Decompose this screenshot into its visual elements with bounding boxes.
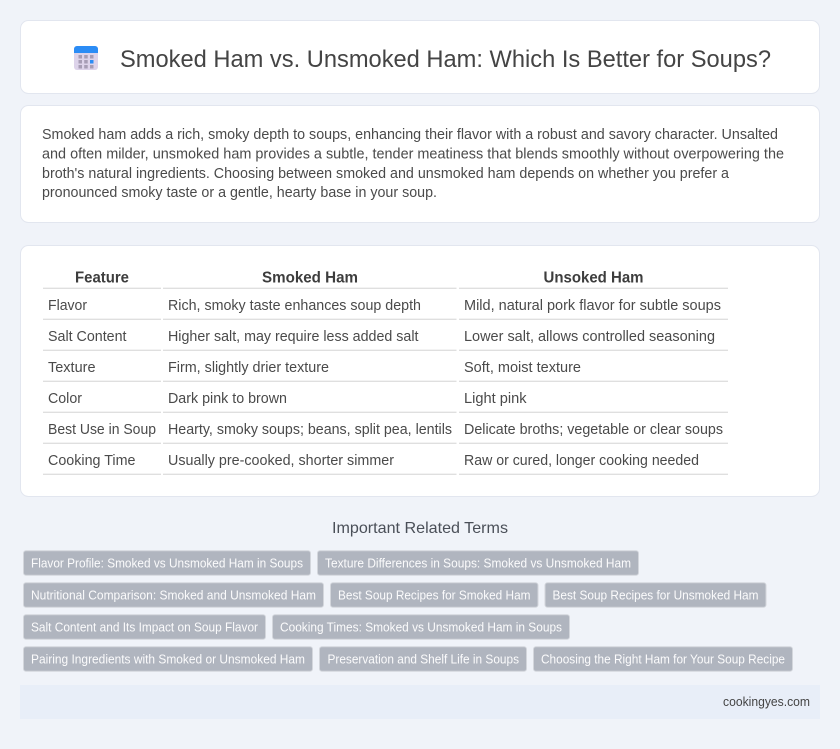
footer [20, 685, 820, 719]
tag [24, 615, 266, 639]
table row: best use in soup: Delicate broths; vegetable or clear soups [464, 422, 723, 438]
tag [272, 615, 570, 639]
table row: flavor: Rich, smoky taste enhances soup depth [168, 298, 421, 314]
table row: cooking time: Cooking Time [48, 453, 136, 469]
icon: calendar [74, 46, 98, 70]
tag [330, 583, 538, 607]
table row: texture: Texture [48, 360, 96, 376]
tag [318, 551, 638, 575]
table row: color: Dark pink to brown [168, 391, 287, 407]
tag [545, 583, 766, 607]
table row: salt content: Lower salt, allows controlled seasoning [464, 329, 715, 345]
table row: cooking time: Raw or cured, longer cooking needed [464, 453, 699, 469]
table row: texture: Soft, moist texture [464, 360, 581, 376]
tag: Choosing the Right Ham for Your Soup Recipe [541, 652, 785, 666]
table row: best use in soup: Hearty, smoky soups; beans, split pea, lentils [168, 422, 452, 438]
tag: Cooking Times: Smoked vs Unsmoked Ham in Soups [280, 620, 562, 634]
heading: important related terms: Important Related Terms [332, 520, 508, 537]
table header row: Smoked Ham [262, 270, 358, 287]
table row: cooking time [48, 453, 699, 469]
tag [24, 551, 310, 575]
tag: Texture Differences in Soups: Smoked vs Unsmoked Ham [325, 556, 631, 570]
footer: cookingyes.com [723, 695, 810, 709]
panel: description [20, 106, 820, 222]
tag: Best Soup Recipes for Unsmoked Ham [552, 588, 758, 602]
tag [534, 647, 792, 671]
tag: Best Soup Recipes for Smoked Ham [338, 588, 530, 602]
table row: texture: Firm, slightly drier texture [168, 360, 329, 376]
panel: title header [20, 20, 820, 94]
tag: Flavor Profile: Smoked vs Unsmoked Ham in Soups [31, 556, 303, 570]
table row: best use in soup: Best Use in Soup [48, 422, 156, 438]
tag [24, 647, 312, 671]
table row: color: Color [48, 391, 82, 407]
table row: flavor: Mild, natural pork flavor for subtle soups [464, 298, 721, 314]
table row: color: Light pink [464, 391, 527, 407]
text block: description paragraph: and often milder, unsmoked ham provides a subtle, tender meatiness that blends smoothly without overpowering the [42, 146, 784, 162]
text block: description paragraph: Smoked ham adds a rich, smoky depth to soups, enhancing their flavor with a robust and savory character. Unsalted [42, 127, 778, 143]
table row: best use in soup [48, 422, 723, 438]
table row: salt content: Higher salt, may require less added salt [168, 329, 418, 345]
text block: description paragraph: broth's natural ingredients. Choosing between smoked and unsmoked ham depends on whether you prefer a [42, 166, 730, 182]
tag: Salt Content and Its Impact on Soup Flavor [31, 620, 258, 634]
table header row [75, 270, 644, 287]
table row: salt content: Salt Content [48, 329, 126, 345]
table row: color [48, 391, 527, 407]
tag: Nutritional Comparison: Smoked and Unsmoked Ham [31, 588, 316, 602]
table row: flavor [48, 298, 721, 314]
table row: texture [48, 360, 581, 376]
table header row: Feature [75, 270, 129, 287]
table header row: Unsoked Ham [544, 270, 644, 287]
tag [320, 647, 526, 671]
related term tags [24, 551, 792, 671]
tag: Preservation and Shelf Life in Soups [328, 652, 519, 666]
table row: salt content [48, 329, 715, 345]
table row: cooking time: Usually pre-cooked, shorter simmer [168, 453, 394, 469]
title: Smoked Ham vs. Unsmoked Ham: Which Is Better for Soups? [120, 46, 771, 73]
table row: flavor: Flavor [48, 298, 87, 314]
text block: description paragraph [42, 127, 784, 201]
tag: Pairing Ingredients with Smoked or Unsmoked Ham [31, 652, 305, 666]
tag [24, 583, 324, 607]
text block: description paragraph: pronounced smoky taste or a gentle, hearty base in your soup. [42, 185, 437, 201]
panel: comparison table [20, 246, 820, 496]
